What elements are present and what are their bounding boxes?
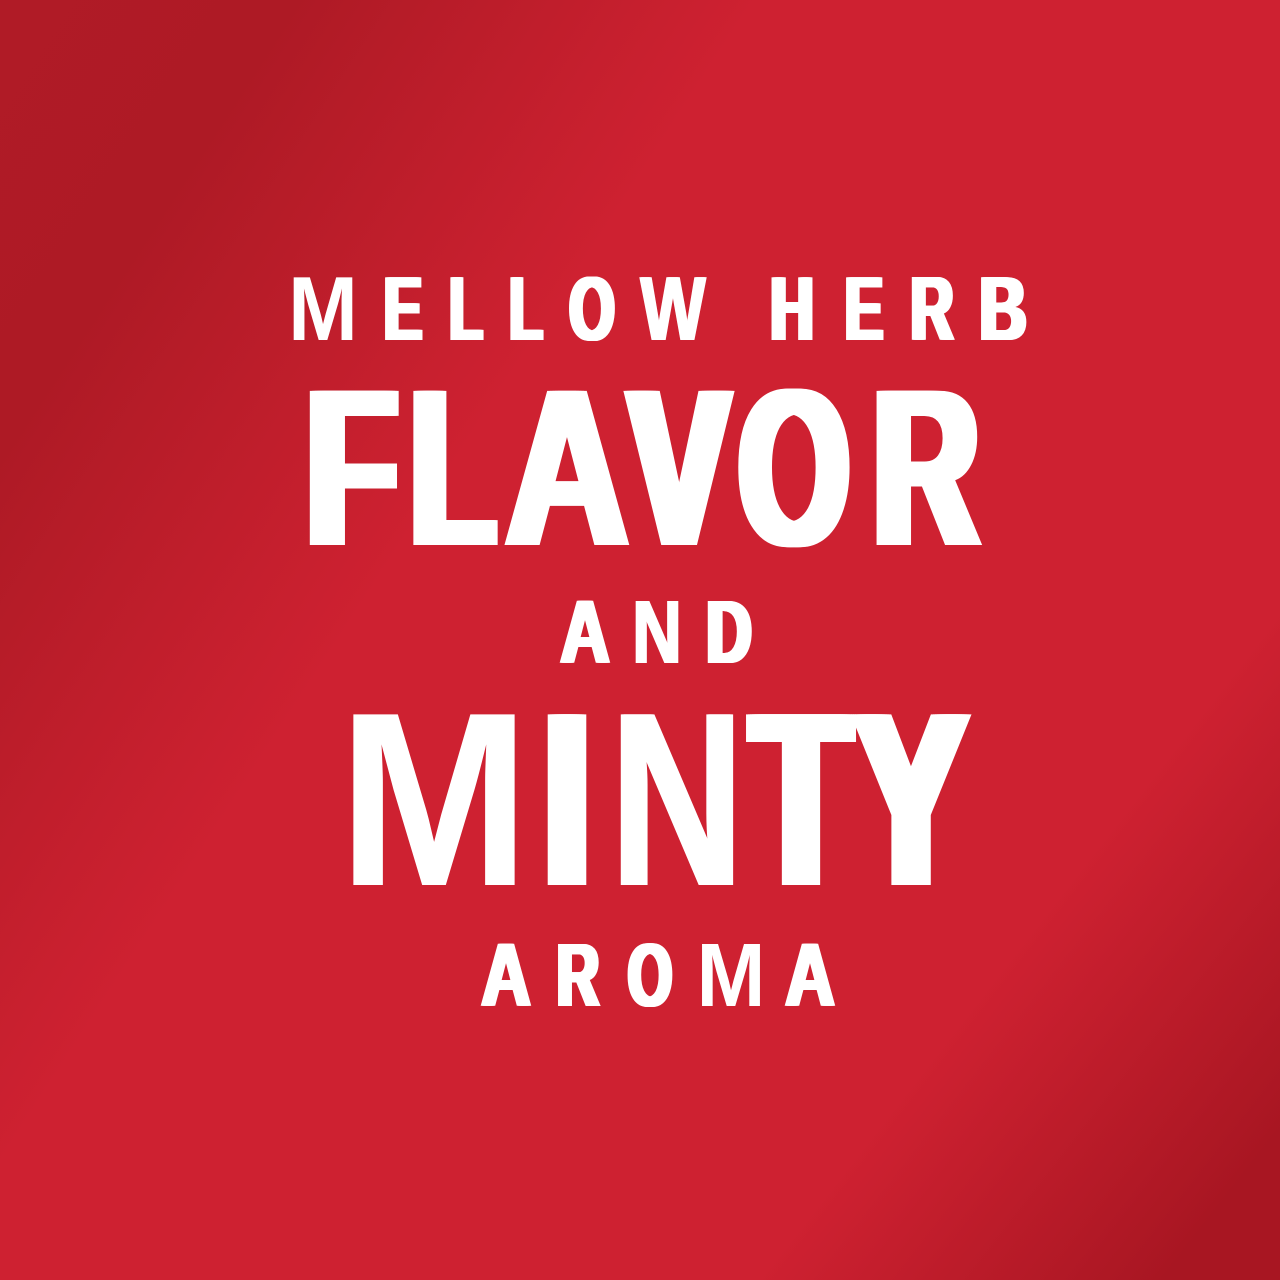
heading line: AROMA: A <box>481 926 531 1026</box>
heading line: AROMA: A <box>785 926 835 1026</box>
heading line: AROMA: M <box>697 926 765 1026</box>
heading line: MELLOW HERB: L <box>509 258 543 360</box>
heading line: MELLOW HERB: L <box>449 258 483 360</box>
heading line: AND: N <box>632 583 682 683</box>
heading line: AROMA: R <box>556 926 599 1026</box>
heading line: MINTY: M <box>338 660 530 938</box>
heading line: FLAVOR: L <box>411 343 495 593</box>
heading line: MELLOW HERB: B <box>980 258 1026 360</box>
heading line: MINTY: Y <box>856 660 966 938</box>
heading line: MELLOW HERB <box>288 258 1026 360</box>
heading line: AND: D <box>707 583 751 683</box>
heading line: MINTY <box>338 660 972 938</box>
heading line: MELLOW HERB: R <box>910 258 953 360</box>
heading line: MELLOW HERB: M <box>288 258 358 360</box>
heading line: FLAVOR <box>307 343 982 593</box>
heading line: FLAVOR: R <box>873 343 978 593</box>
heading line: MELLOW HERB: O <box>569 258 615 360</box>
heading line: MELLOW HERB: E <box>845 258 883 360</box>
heading line: FLAVOR: F <box>307 343 397 593</box>
heading line: AND <box>560 583 752 683</box>
heading line: MELLOW HERB: W <box>640 258 705 360</box>
heading line: FLAVOR: V <box>629 343 728 593</box>
heading line: AROMA <box>480 926 836 1026</box>
heading line: MELLOW HERB: H <box>770 258 813 360</box>
heading line: MELLOW HERB: E <box>384 258 422 360</box>
heading line: AROMA: O <box>627 926 672 1026</box>
heading line: AND: A <box>560 583 610 683</box>
heading line: MINTY: N <box>610 660 744 938</box>
heading line: MINTY: I <box>544 660 590 938</box>
heading line: FLAVOR: O <box>739 343 849 593</box>
heading line: MINTY: T <box>752 660 850 938</box>
heading line: FLAVOR: A <box>506 343 628 593</box>
